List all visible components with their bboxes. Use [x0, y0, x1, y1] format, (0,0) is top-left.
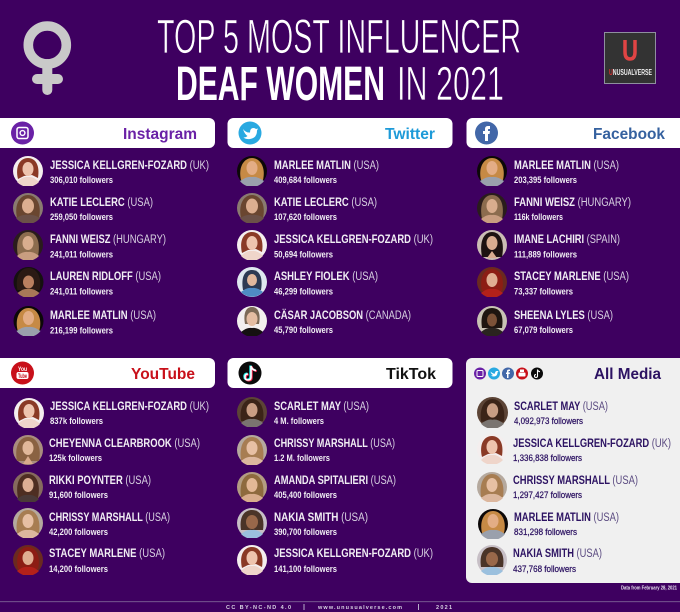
entry: Fanni Weisz: FANNI WEISZ (HUNGARY)	[514, 197, 631, 209]
entry: Cheyenna Clearbrook	[13, 435, 200, 465]
entry: Stacey Marlene: 14,200 followers	[49, 564, 108, 575]
icon: venus symbol	[28, 26, 66, 90]
entry: Lauren Ridloff: LAUREN RIDLOFF (USA)	[50, 271, 161, 283]
entry: Chrissy Marshall: 1,297,427 followers	[513, 490, 582, 501]
entry: Jessica Kellgren-Fozard: JESSICA KELLGREN-FOZARD (UK)	[50, 401, 209, 413]
entry: Chrissy Marshall	[13, 508, 170, 539]
logo: Unusualverse: UNUSUALVERSE	[609, 68, 652, 77]
header: Twitter	[228, 118, 452, 148]
entry: Chrissy Marshall	[477, 472, 638, 503]
footer: CC BY-NC-ND 4.0	[226, 605, 291, 611]
icon: Twitter	[238, 122, 262, 144]
entry: Jessica Kellgren-Fozard: JESSICA KELLGREN-FOZARD (UK)	[50, 160, 209, 172]
entry: Amanda Spitalieri: AMANDA SPITALIERI (USA)	[274, 475, 396, 487]
icons: all social networks	[474, 368, 543, 380]
entry: Scarlet May	[237, 397, 369, 428]
entry: Fanni Weisz: 241,011 followers	[50, 250, 113, 260]
header: TikTok: TikTok	[386, 366, 436, 383]
header: Facebook: Facebook	[593, 126, 665, 143]
logo: Unusualverse	[604, 32, 656, 84]
footer: www.unusualverse.com	[317, 605, 402, 611]
icon: Instagram	[11, 122, 34, 144]
entry: Rikki Poynter	[13, 472, 151, 504]
entry: Marlee Matlin: 203,395 followers	[514, 175, 577, 186]
entry: Jessica Kellgren-Fozard: JESSICA KELLGREN-FOZARD (UK)	[513, 438, 671, 450]
header: Instagram	[0, 118, 215, 148]
entry: Cheyenna Clearbrook: 125k followers	[49, 453, 102, 464]
entry: Imane Lachiri: IMANE LACHIRI (SPAIN)	[514, 234, 620, 246]
entry: Fanni Weisz: FANNI WEISZ (HUNGARY)	[50, 234, 166, 246]
entry: Jessica Kellgren-Fozard	[237, 230, 433, 261]
entry: Jessica Kellgren-Fozard: 306,010 followers	[50, 175, 113, 186]
entry: Ashley Fiolek	[237, 267, 378, 298]
entry: Scarlet May	[477, 397, 608, 429]
entry: Jessica Kellgren-Fozard	[237, 545, 433, 576]
entry: Jessica Kellgren-Fozard	[14, 398, 209, 429]
entry: Marlee Matlin	[478, 509, 619, 540]
panel: Twitter	[228, 118, 452, 337]
title: IN 2021	[397, 58, 504, 111]
icon: YouTube	[11, 362, 34, 384]
entry: Chrissy Marshall: CHRISSY MARSHALL (USA)	[513, 475, 638, 487]
entry: Sheena Lyles: SHEENA LYLES (USA)	[514, 310, 613, 322]
entry: Stacey Marlene	[13, 545, 165, 576]
entry: Ashley Fiolek: ASHLEY FIOLEK (USA)	[274, 271, 378, 283]
entry: Marlee Matlin: MARLEE MATLIN (USA)	[50, 310, 156, 322]
entry: Katie Leclerc: KATIE LECLERC (USA)	[274, 197, 377, 209]
entry: Imane Lachiri: 111,889 followers	[514, 250, 577, 260]
entry: Fanni Weisz	[13, 230, 166, 261]
entry: Stacey Marlene: STACEY MARLENE (USA)	[514, 271, 629, 283]
entry: Katie Leclerc	[13, 193, 153, 224]
entry: Cäsar Jacobson: 45,790 followers	[274, 325, 333, 336]
entry: Scarlet May: SCARLET MAY (USA)	[274, 401, 369, 413]
header: TikTok	[228, 358, 452, 388]
entry: Marlee Matlin: 831,298 followers	[514, 527, 577, 538]
entry: Jessica Kellgren-Fozard	[13, 156, 209, 187]
icon: YouTube: Tube	[18, 374, 27, 380]
entry: Jessica Kellgren-Fozard: 141,100 followers	[274, 564, 337, 575]
entry: Fanni Weisz: 116k followers	[514, 212, 563, 223]
entry: Katie Leclerc	[237, 193, 377, 224]
entry: Cheyenna Clearbrook: CHEYENNA CLEARBROOK (USA)	[49, 438, 200, 450]
entry: Lauren Ridloff	[14, 267, 161, 298]
entry: Nakia Smith: 390,700 followers	[274, 527, 337, 538]
entry: Marlee Matlin: 409,684 followers	[274, 175, 337, 186]
header: YouTube: YouTube	[131, 366, 195, 383]
panel: TikTok	[228, 358, 452, 576]
entry: Scarlet May: 4,092,973 followers	[514, 416, 583, 427]
entry: Nakia Smith: 437,768 followers	[513, 564, 576, 575]
entry: Stacey Marlene: 73,337 followers	[514, 286, 573, 298]
icon: YouTube: You	[18, 367, 27, 373]
entry: Katie Leclerc: KATIE LECLERC (USA)	[50, 197, 153, 209]
entry: Chrissy Marshall: 1.2 M. followers	[274, 453, 330, 464]
header: Facebook	[466, 118, 680, 148]
entry: Katie Leclerc: 107,620 followers	[274, 212, 337, 223]
entry: Amanda Spitalieri	[237, 472, 396, 503]
icon: TikTok	[238, 362, 262, 384]
entry: Scarlet May: SCARLET MAY (USA)	[514, 401, 608, 413]
entry: Marlee Matlin	[14, 306, 156, 337]
entry: Chrissy Marshall: CHRISSY MARSHALL (USA)	[49, 512, 170, 524]
entry: Chrissy Marshall: 42,200 followers	[49, 527, 108, 538]
entry: Jessica Kellgren-Fozard: 1,336,838 followers	[513, 453, 582, 464]
entry: Katie Leclerc: 259,050 followers	[50, 212, 113, 223]
entry: Chrissy Marshall	[237, 435, 395, 466]
entry: Imane Lachiri	[477, 230, 620, 260]
title: DEAF WOMEN	[176, 58, 385, 111]
panel: All Media	[466, 358, 680, 583]
entry: Marlee Matlin: 216,199 followers	[50, 326, 113, 336]
panel: YouTube	[0, 358, 215, 576]
title	[157, 11, 521, 111]
entry: Stacey Marlene: STACEY MARLENE (USA)	[49, 548, 165, 560]
entry: Nakia Smith: NAKIA SMITH (USA)	[274, 512, 368, 524]
entry: Cäsar Jacobson: CÄSAR JACOBSON (CANADA)	[274, 309, 411, 322]
entry: Marlee Matlin: MARLEE MATLIN (USA)	[514, 512, 619, 524]
entry: Rikki Poynter: 91,600 followers	[49, 490, 108, 501]
entry: Amanda Spitalieri: 405,400 followers	[274, 490, 337, 501]
entry: Rikki Poynter: RIKKI POYNTER (USA)	[49, 475, 151, 487]
footer	[0, 601, 680, 611]
entry: Lauren Ridloff: 241,011 followers	[50, 286, 113, 298]
icon: Facebook	[475, 122, 498, 144]
panel: Facebook	[466, 118, 680, 337]
entry: Chrissy Marshall: CHRISSY MARSHALL (USA)	[274, 438, 395, 450]
header: Instagram: Instagram	[123, 126, 197, 143]
footer: 2021	[436, 605, 452, 611]
entry: Jessica Kellgren-Fozard: JESSICA KELLGREN-FOZARD (UK)	[274, 548, 433, 560]
entry: Jessica Kellgren-Fozard: JESSICA KELLGREN-FOZARD (UK)	[274, 234, 433, 246]
entry: Marlee Matlin	[477, 156, 619, 187]
entry: Cäsar Jacobson	[237, 306, 411, 337]
header: YouTube	[0, 358, 215, 388]
entry: Marlee Matlin	[237, 156, 379, 187]
panel: Instagram	[0, 118, 215, 337]
entry: Sheena Lyles: 67,079 followers	[514, 325, 573, 336]
panel: All Media: All Media	[594, 366, 661, 383]
entry: Ashley Fiolek: 46,299 followers	[274, 286, 333, 298]
entry: Nakia Smith: NAKIA SMITH (USA)	[513, 548, 602, 560]
entry: Sheena Lyles	[477, 306, 613, 337]
entry: Scarlet May: 4 M. followers	[274, 416, 324, 427]
header: Twitter: Twitter	[385, 126, 435, 143]
entry: Marlee Matlin: MARLEE MATLIN (USA)	[514, 160, 619, 172]
entry: Jessica Kellgren-Fozard: 50,694 followers	[274, 250, 333, 260]
entry: Jessica Kellgren-Fozard	[477, 434, 671, 465]
entry: Stacey Marlene	[477, 267, 629, 298]
entry: Fanni Weisz	[477, 193, 631, 224]
entry: Marlee Matlin: MARLEE MATLIN (USA)	[274, 160, 379, 172]
entry: Jessica Kellgren-Fozard: 837k followers	[50, 416, 103, 427]
entry: Nakia Smith	[237, 508, 368, 539]
entry: Nakia Smith	[477, 545, 602, 576]
